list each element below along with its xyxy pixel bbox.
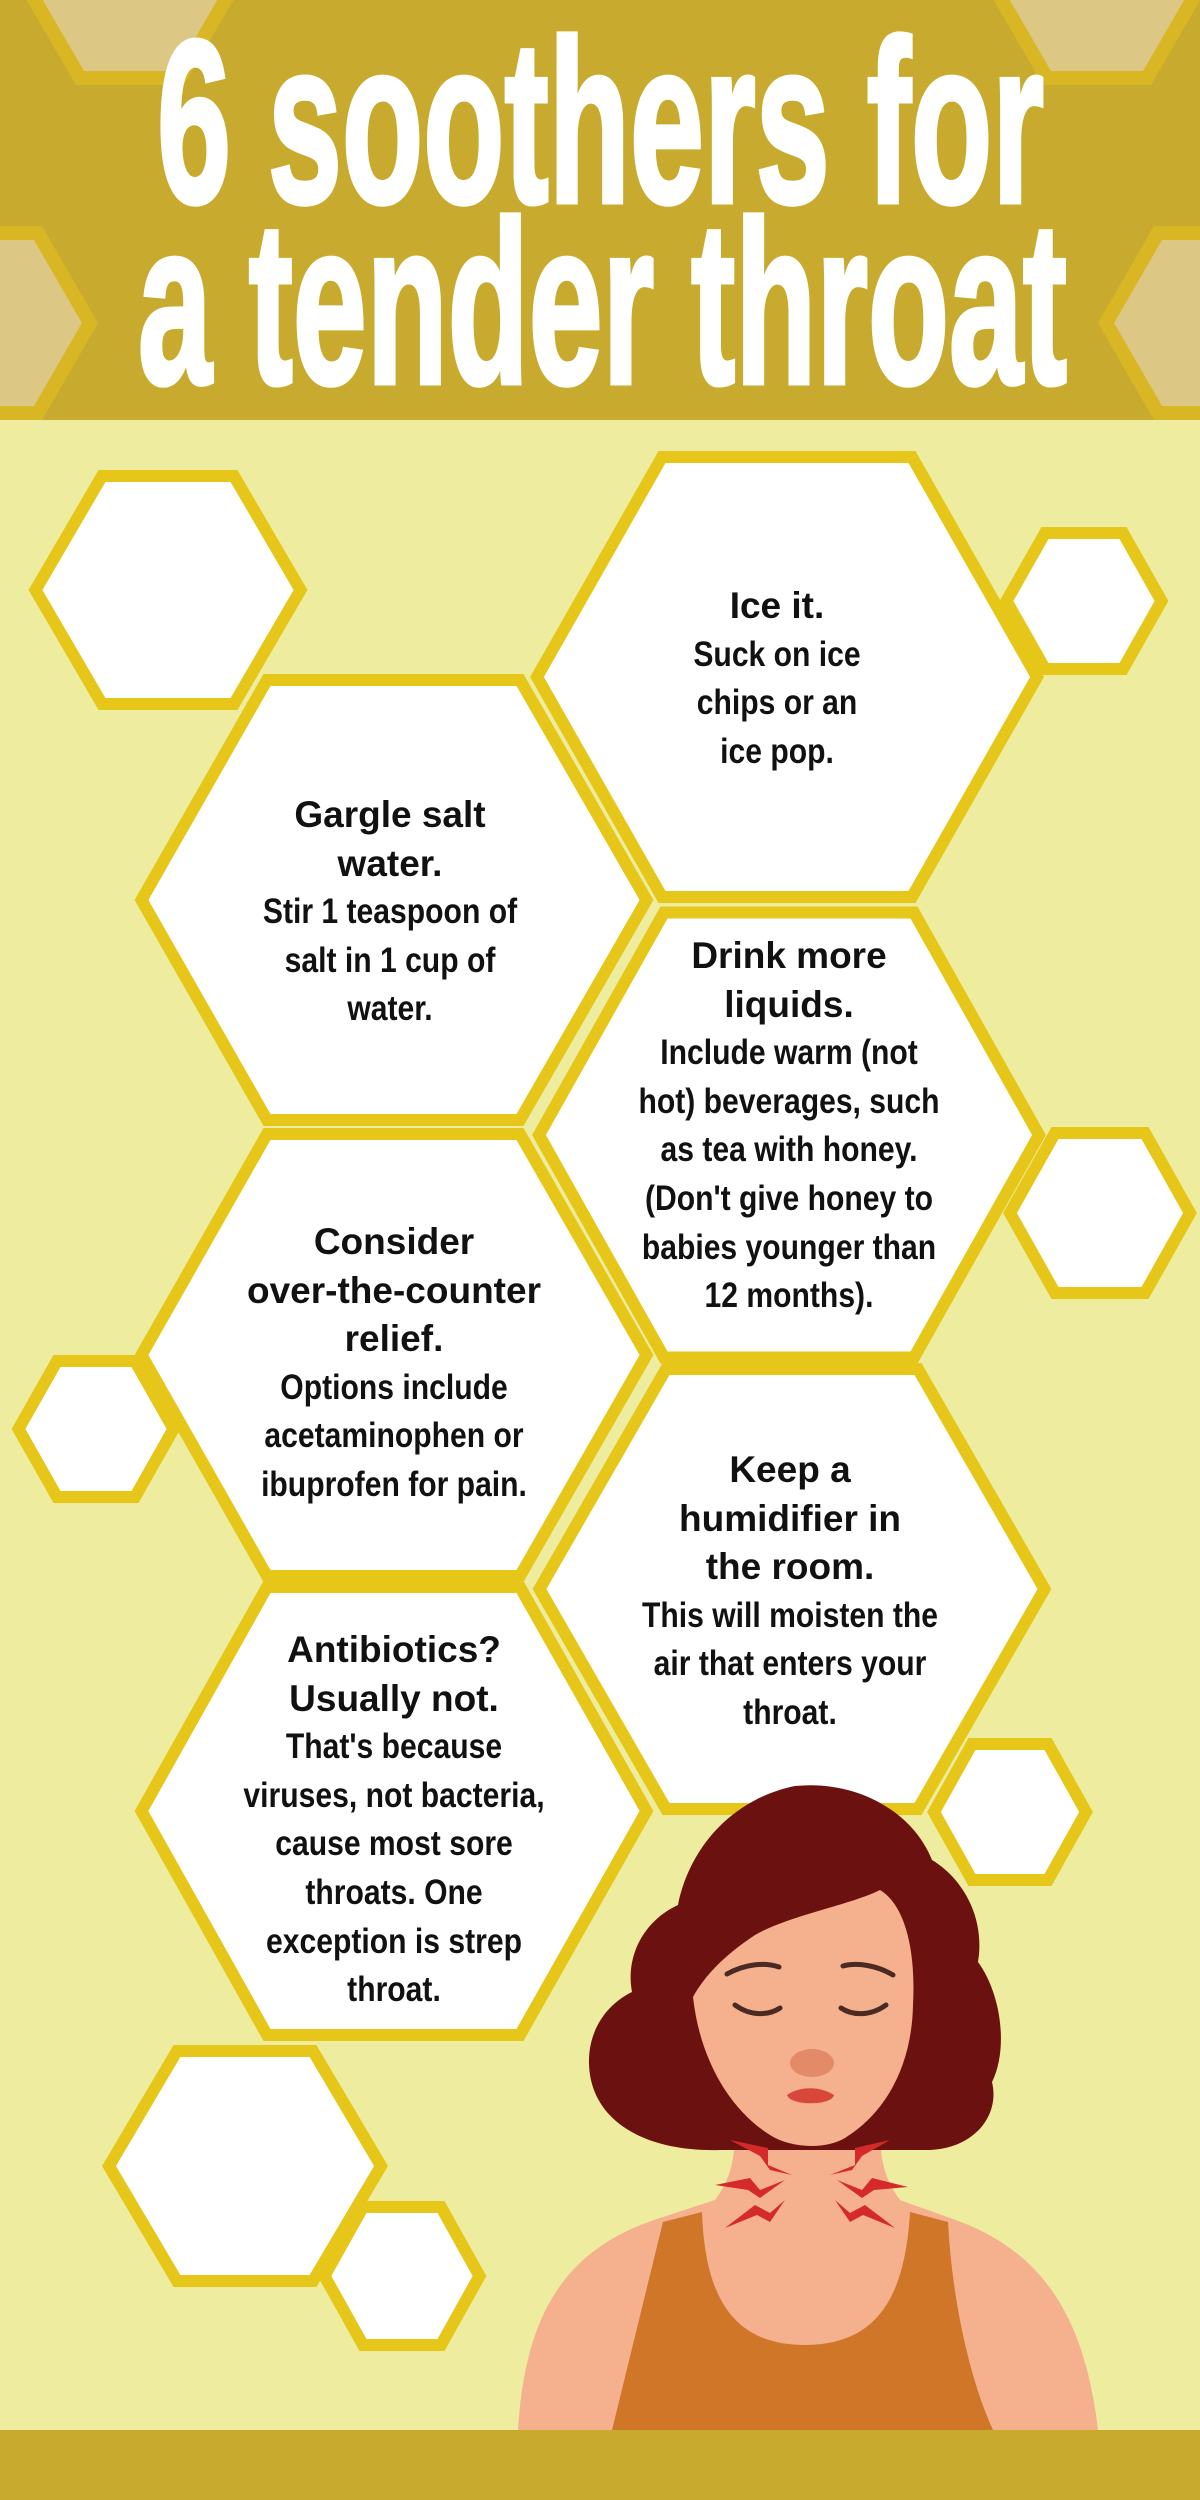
text: over-the-counter relief: ibuprofen for pain. xyxy=(261,1465,527,1504)
text: gargle salt water: water. xyxy=(347,989,433,1028)
text: gargle salt water: water. xyxy=(338,843,442,884)
text: drink more liquids: as tea with honey. xyxy=(660,1130,918,1169)
text: over-the-counter relief: relief. xyxy=(345,1318,443,1359)
text: drink more liquids: (Don't give honey to xyxy=(645,1179,933,1218)
title xyxy=(138,0,1067,433)
text: drink more liquids xyxy=(638,935,940,1315)
text: over-the-counter relief: acetaminophen or xyxy=(264,1416,524,1455)
text: drink more liquids: Include warm (not xyxy=(660,1033,918,1072)
text: antibiotics xyxy=(243,1629,545,2009)
text: over-the-counter relief: over-the-counter xyxy=(247,1270,541,1311)
text: drink more liquids: Drink more xyxy=(691,935,887,976)
text: over-the-counter relief: Consider xyxy=(314,1221,474,1262)
text: humidifier: This will moisten the xyxy=(642,1596,938,1635)
text: humidifier: the room. xyxy=(706,1546,874,1587)
text: humidifier: Keep a xyxy=(729,1449,851,1490)
text: humidifier: humidifier in xyxy=(679,1498,901,1539)
text: antibiotics: Usually not. xyxy=(289,1678,499,1719)
text: gargle salt water: Gargle salt xyxy=(294,794,486,835)
text: gargle salt water: salt in 1 cup of xyxy=(285,941,495,980)
text: antibiotics: throats. One xyxy=(305,1873,483,1912)
text: antibiotics: That's because xyxy=(286,1727,502,1766)
text: ice it: chips or an xyxy=(697,683,857,722)
text: antibiotics: viruses, not bacteria, xyxy=(243,1776,545,1815)
text: ice it xyxy=(693,585,861,771)
text: drink more liquids: 12 months). xyxy=(705,1276,873,1315)
text: over-the-counter relief: Options include xyxy=(280,1368,508,1407)
footer band xyxy=(0,2430,1200,2500)
header band xyxy=(0,0,1200,420)
text: antibiotics: Antibiotics? xyxy=(287,1629,501,1670)
text: antibiotics: cause most sore xyxy=(275,1824,513,1863)
text: gargle salt water: Stir 1 teaspoon of xyxy=(263,892,517,931)
text: antibiotics: exception is strep xyxy=(266,1922,522,1961)
text: humidifier: air that enters your xyxy=(654,1644,926,1683)
text: over-the-counter relief xyxy=(247,1221,541,1504)
text: drink more liquids: hot) beverages, such xyxy=(638,1082,940,1121)
text: gargle salt water xyxy=(263,794,518,1028)
text: drink more liquids: babies younger than xyxy=(642,1228,936,1267)
text: humidifier: throat. xyxy=(743,1693,837,1732)
text: ice it: ice pop. xyxy=(720,732,834,771)
text: drink more liquids: liquids. xyxy=(724,984,854,1025)
text: ice it: Suck on ice xyxy=(693,635,861,674)
text: antibiotics: throat. xyxy=(347,1970,441,2009)
text: ice it: Ice it. xyxy=(730,585,824,626)
text: humidifier xyxy=(642,1449,938,1732)
